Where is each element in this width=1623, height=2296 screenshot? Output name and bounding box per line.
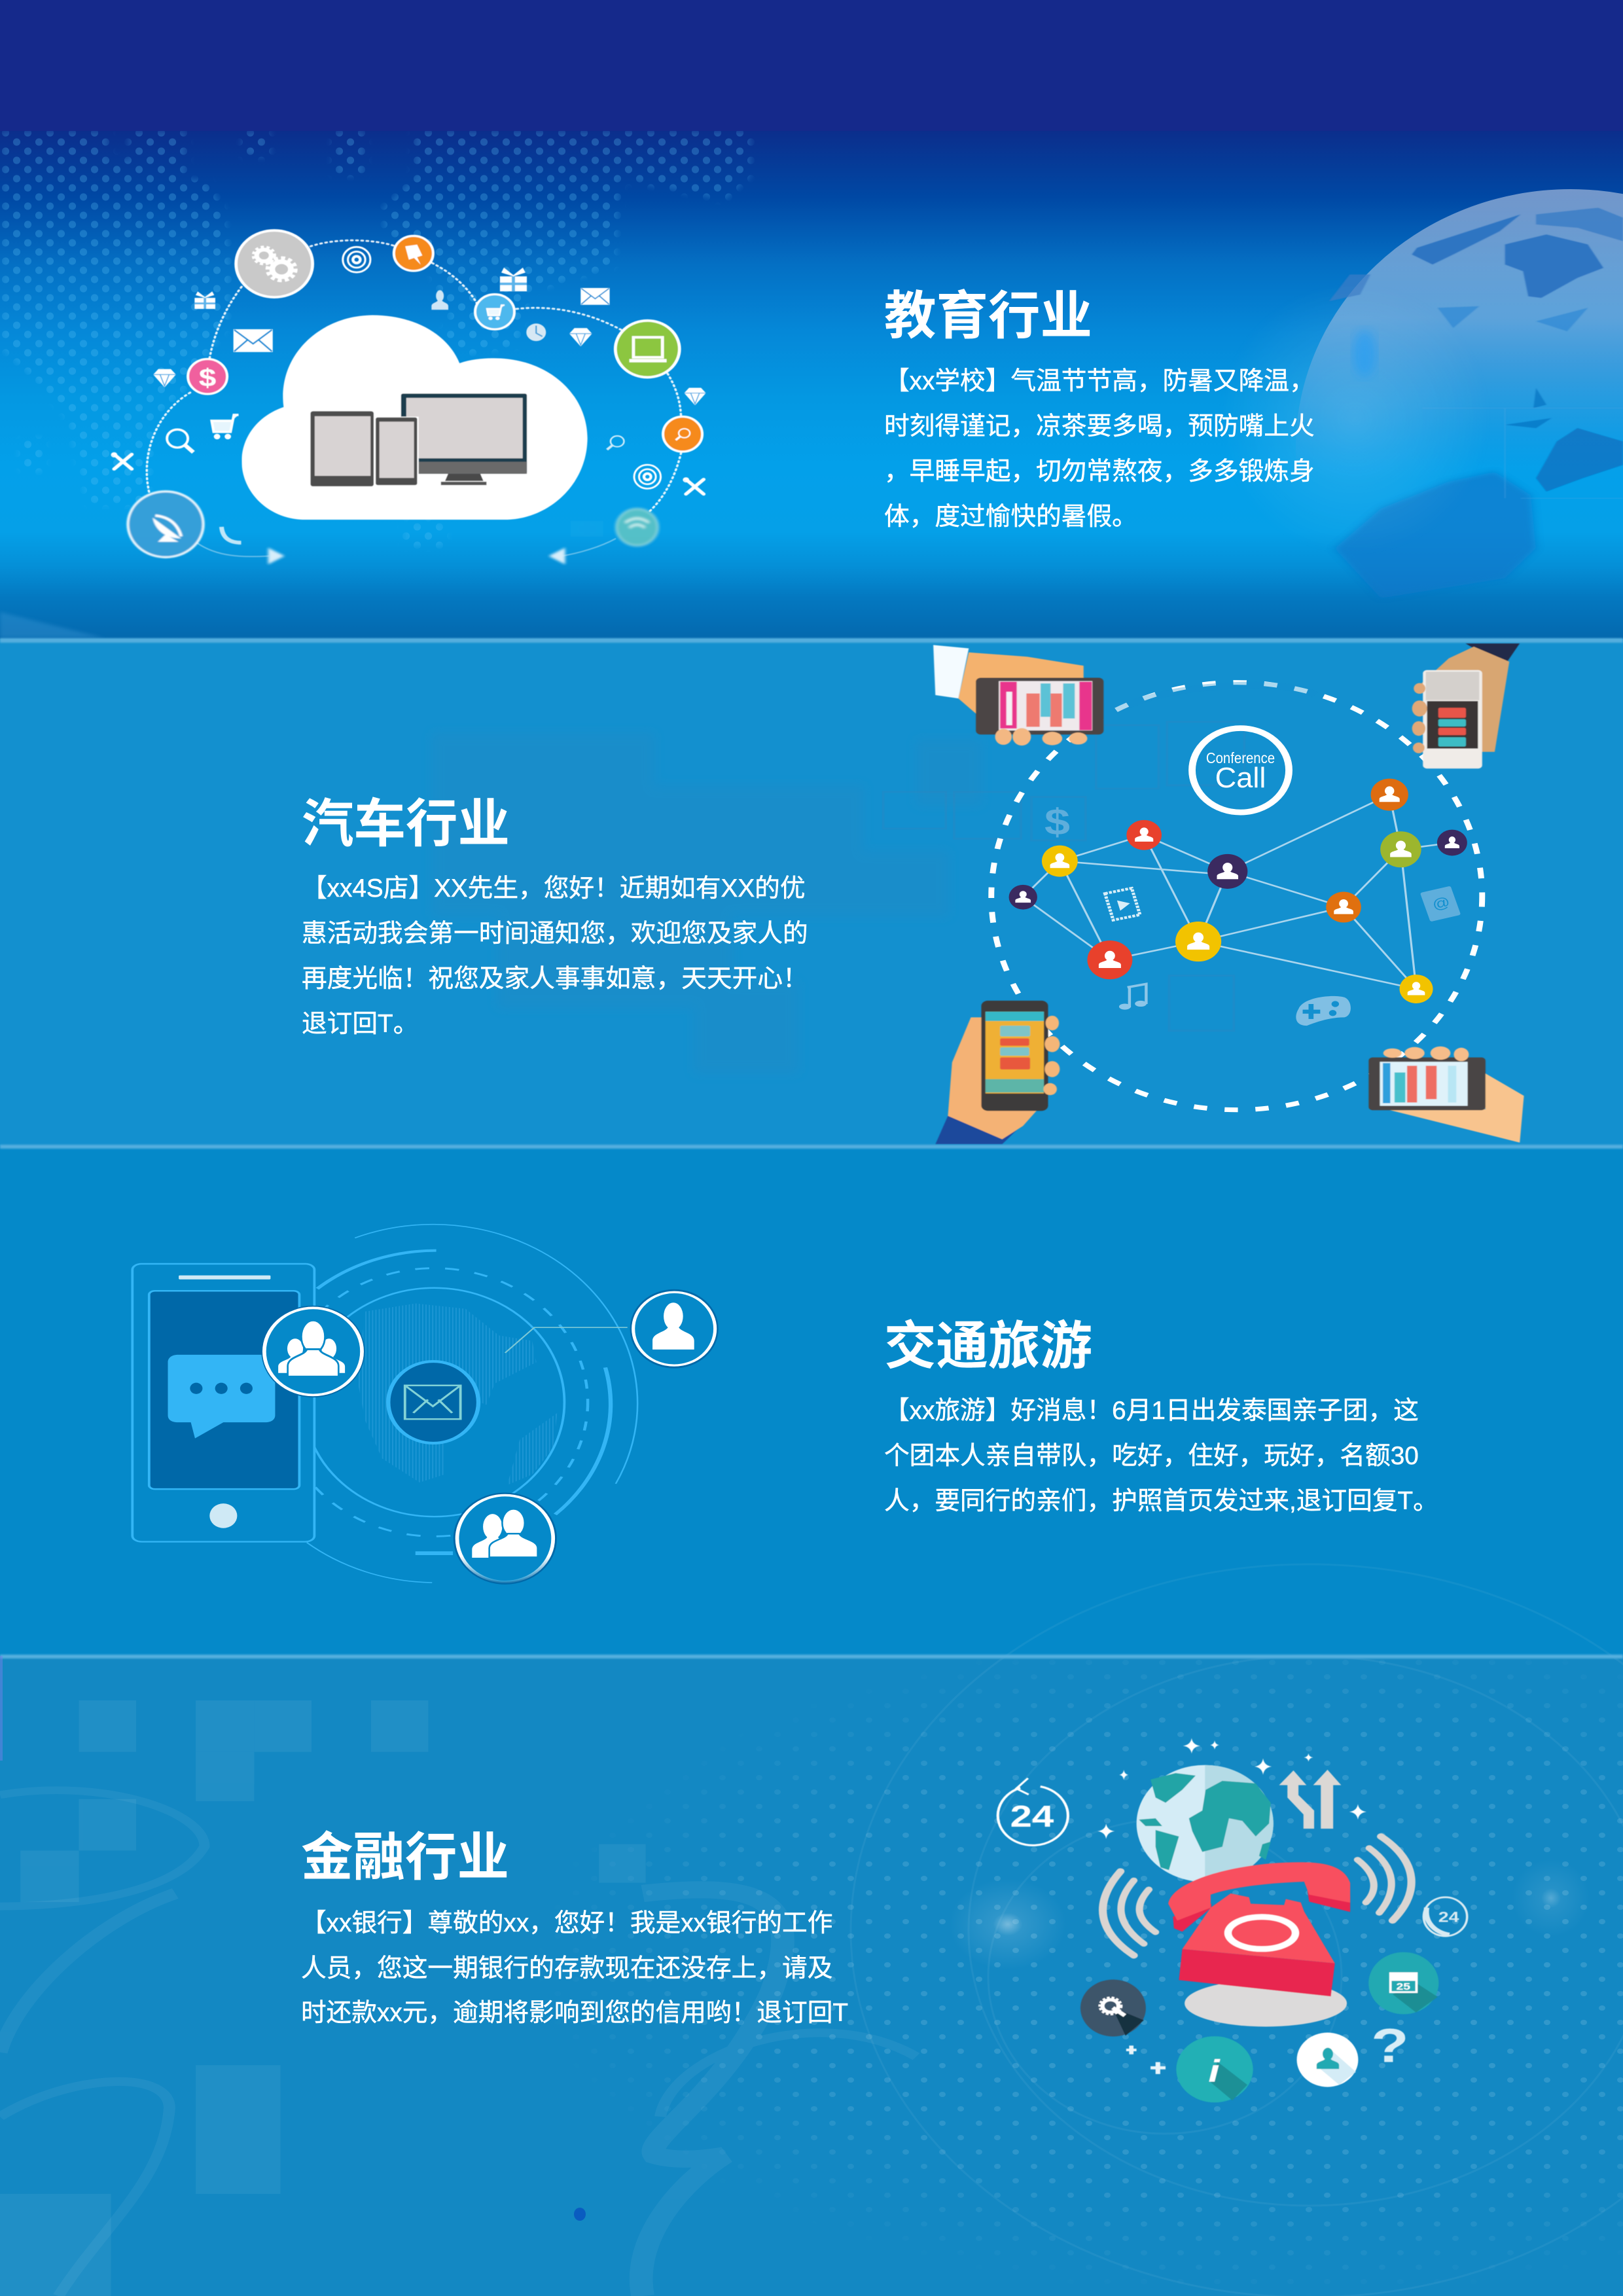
icon: pink dollar circle: $ [199, 364, 216, 392]
panel: automotive industry [0, 639, 1623, 1146]
globe [1296, 189, 1623, 706]
badge: single person [630, 1289, 719, 1369]
heading: 金融行业 [301, 1828, 509, 1886]
globe landmass lines [357, 1303, 558, 1485]
icon: orange search circle [663, 417, 702, 452]
sound waves [1103, 1837, 1412, 1956]
icon: pink dollar circle [188, 359, 227, 394]
icon: phone handset [221, 527, 241, 543]
icon: orange pin circle [394, 236, 433, 271]
icon: 24 hours [998, 1778, 1068, 1845]
icon: faded arrows [268, 548, 565, 564]
cloud [241, 315, 588, 520]
panel: education industry [0, 0, 1623, 706]
body text [301, 1909, 848, 2027]
section background [0, 1146, 1623, 1656]
section background [0, 1656, 1623, 2296]
sparkles [1097, 1738, 1366, 1839]
pointer line [505, 1327, 628, 1353]
section background gradient [0, 131, 1623, 639]
heading: 交通旅游 [884, 1317, 1092, 1375]
top faded ring overlay [1115, 685, 1315, 712]
conference call badge: Conference [1206, 749, 1275, 766]
body text: 人，要同行的亲们，护照首页发过来,退订回复T。 [884, 1487, 1438, 1515]
body text: ，早睡早起，切勿常熬夜，多多锻炼身 [884, 457, 1315, 486]
body text: 【xx旅游】好消息！6月1日出发泰国亲子团，这 [884, 1397, 1419, 1425]
panel: finance [0, 1564, 1623, 2296]
dotted world map background [2, 131, 754, 548]
network lines [1023, 795, 1452, 989]
icon: info [1176, 2036, 1253, 2102]
icon: faded envelope [573, 522, 600, 535]
heading: 教育行业 [884, 287, 1092, 345]
concentric rings [281, 1225, 637, 1583]
pale squares and ribbons [0, 1700, 916, 2296]
shadow ellipse [1185, 1980, 1347, 2026]
light glints [949, 1859, 1590, 1970]
body text: 【xx银行】尊敬的xx，您好！我是xx银行的工作 [301, 1909, 832, 1937]
devices in cloud [310, 393, 527, 486]
body text: 人员，您这一期银行的存款现在还没存上，请及 [301, 1954, 832, 1982]
blue dot [574, 2208, 586, 2221]
body text: 再度光临！祝您及家人事事如意，天天开心！ [302, 965, 808, 993]
icon: hand and phone bottom left [935, 1001, 1060, 1144]
faint squares [883, 722, 1244, 1031]
icon: laptop circle [615, 321, 679, 378]
left edge purple sliver [0, 1656, 3, 1761]
body text: 时刻得谨记，凉茶要多喝，预防嘴上火 [884, 412, 1315, 440]
dotted texture [609, 1660, 1623, 2270]
icon: music note [1119, 984, 1147, 1010]
center mail badge [388, 1361, 478, 1443]
icon: satellite circle [128, 492, 204, 557]
icon: gamepad [1296, 996, 1351, 1026]
icon: address book: @ [1430, 894, 1452, 913]
icon: gift right [500, 268, 527, 291]
phone [132, 1264, 314, 1542]
icon: question mark: ? [1371, 2019, 1409, 2072]
body text: 个团本人亲自带队，吃好，住好，玩好，名额30 [884, 1442, 1419, 1470]
icon: cart outline [211, 415, 239, 439]
icon: gift left [194, 291, 215, 309]
icon: envelope large [234, 329, 273, 352]
icon: user [1297, 2033, 1358, 2087]
illustration: conference call network [883, 643, 1524, 1144]
conference call badge [1192, 728, 1289, 812]
network nodes [1009, 779, 1467, 1003]
telephone [1168, 1862, 1350, 1996]
conference call badge: Call [1215, 761, 1266, 794]
body text: 【xx4S店】XX先生，您好！近期如有XX的优 [302, 874, 806, 903]
body text [302, 874, 808, 1038]
icon: wrench gear [1080, 1979, 1146, 2036]
icon: 24 phone: 24 [1438, 1909, 1459, 1926]
faint rings [851, 1564, 1623, 2296]
illustration: cloud with connected devices [112, 230, 706, 564]
icon: magnifiers [167, 429, 624, 452]
icon: road arrows [1279, 1770, 1341, 1829]
icon: 24 hours: 24 [1010, 1799, 1054, 1833]
icon: dollar: $ [1044, 802, 1070, 843]
icon: tools [112, 453, 704, 494]
body text [884, 367, 1315, 531]
section separators [0, 638, 1623, 1659]
illustration: phone with messaging globe [132, 1225, 719, 1585]
icon: 24 phone [1423, 1897, 1467, 1936]
icon: info: i [1208, 2053, 1221, 2089]
badge: two people [454, 1492, 557, 1585]
icon: plus signs [1126, 2045, 1166, 2074]
icon: target lower right [634, 465, 661, 489]
faint map background [432, 733, 982, 1073]
top navy band [0, 0, 1623, 131]
body text [884, 1397, 1438, 1515]
icon: envelope top right [580, 288, 610, 305]
cloud fog on globe [1217, 281, 1492, 556]
section background [0, 639, 1623, 1146]
body text: 体，度过愉快的暑假。 [884, 503, 1137, 531]
icon: cart circle [475, 295, 514, 329]
icon: target [343, 247, 370, 272]
body text: 惠活动我会第一时间通知您，欢迎您及家人的 [302, 920, 808, 948]
dotted connector arcs [147, 240, 681, 511]
icon: hand and phone top left [933, 645, 1103, 745]
illustration: red telephone hotline [998, 1738, 1467, 2102]
icon: hand and phone top right [1412, 643, 1520, 768]
icon: address book [1420, 886, 1461, 922]
icon: calendar: 25 [1397, 1981, 1410, 1992]
heading: 汽车行业 [302, 795, 510, 853]
badge: group of people [261, 1306, 365, 1397]
icon: hand and phone bottom right [1368, 1047, 1524, 1143]
body text: 【xx学校】气温节节高，防暑又降温， [884, 367, 1315, 395]
panel: travel [0, 1146, 1623, 1656]
globe [1137, 1765, 1274, 1882]
lower left light wedge [0, 612, 105, 638]
body text: 退订回T。 [302, 1010, 418, 1038]
icon: diamonds [153, 328, 706, 405]
icon: wifi circle [616, 509, 658, 546]
icon: clock [526, 323, 546, 341]
body text: 时还款xx元，逾期将影响到您的信用哟！退订回T [301, 1999, 848, 2027]
icon: person with bag [431, 290, 448, 310]
dashed ring [991, 683, 1482, 1110]
icon: calendar [1368, 1952, 1438, 2014]
icon: gears circle [236, 230, 313, 297]
icon: film [1105, 888, 1140, 920]
